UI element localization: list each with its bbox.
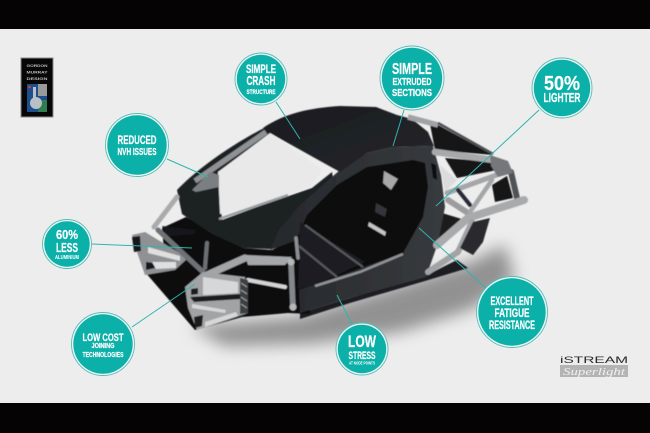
top black band	[0, 0, 650, 29]
sill tube	[315, 254, 403, 286]
logo: iStream Superlight	[560, 355, 628, 378]
front lower silver box	[185, 272, 248, 330]
front tubes	[154, 197, 298, 308]
rear skirt	[300, 260, 468, 319]
callout: simple extruded sections: EXTRUDED	[392, 76, 432, 88]
callout: excellent fatigue resistance: EXCELLENT	[490, 296, 534, 308]
callout lines	[92, 102, 539, 327]
rear upper black frame	[430, 124, 493, 155]
logo: Gordon Murray Design	[21, 58, 53, 117]
front black mass	[145, 217, 310, 330]
rear tubes	[428, 152, 524, 272]
rear joint cluster	[490, 155, 513, 177]
callout: low stress at node points: STRESS	[348, 350, 376, 362]
a pillar joint	[192, 172, 219, 192]
window light behind pillar	[440, 165, 457, 192]
seat slot light	[368, 222, 386, 236]
callout: 50% lighter: LIGHTER	[544, 91, 580, 105]
logo: Gordon Murray Design: MURRAY	[26, 70, 48, 74]
rear lower black floor	[426, 213, 465, 272]
callout: excellent fatigue resistance: RESISTANCE	[489, 320, 535, 332]
windscreen opening	[218, 133, 323, 214]
callout: 60% less aluminium: LESS	[56, 240, 78, 255]
a pillar tube	[195, 132, 266, 181]
rear hoop upper tube	[438, 123, 493, 154]
windscreen lower strip	[219, 195, 288, 219]
seat slot dark	[375, 203, 387, 217]
rear corner black frame	[492, 176, 513, 202]
callout: simple crash structure: CRASH	[246, 73, 276, 88]
callout: 50% lighter: 50%	[544, 72, 580, 95]
logo emblem	[27, 84, 47, 112]
front left silver box	[132, 232, 188, 275]
door opening interior	[298, 160, 428, 290]
logo: iStream Superlight: Superlight	[563, 366, 626, 378]
joint nodes	[288, 258, 294, 266]
callout: 60% less aluminium: ALUMINIUM	[55, 255, 79, 261]
rear mid black frame	[445, 158, 497, 178]
pillar slot	[431, 163, 437, 180]
callout: low stress at node points: LOW	[348, 332, 377, 351]
callout: simple extruded sections	[380, 46, 444, 110]
front lower box highlights	[192, 277, 238, 327]
logo: Gordon Murray Design: DESIGN	[26, 76, 48, 81]
callout: low stress at node points: AT NODE POINTS	[349, 360, 375, 366]
rear roof hoop	[408, 117, 438, 125]
rear module plate	[460, 218, 490, 255]
callout: reduced NVH issues	[106, 114, 168, 176]
front cross band	[245, 255, 292, 265]
floor panels	[298, 222, 365, 289]
logo: iStream Superlight: iSTREAM	[560, 355, 628, 366]
callout: low cost joining technologies: LOW COST	[82, 332, 124, 344]
ground shadow	[190, 245, 515, 346]
roof panel	[263, 106, 434, 172]
floor cross bars	[299, 225, 363, 277]
front lower box openings	[190, 282, 241, 328]
front left box details	[132, 226, 195, 270]
car chassis illustration	[132, 106, 524, 346]
callout: low cost joining technologies: JOINING	[92, 341, 115, 350]
callout: reduced NVH issues: REDUCED	[118, 133, 157, 147]
callout: 50% lighter	[532, 58, 592, 118]
callout: simple crash structure	[235, 53, 287, 105]
callout: reduced NVH issues: NVH ISSUES	[118, 147, 157, 158]
bottom black band	[0, 403, 650, 433]
side body	[270, 146, 445, 313]
logo: Gordon Murray Design: GORDON	[26, 63, 48, 68]
callout: excellent fatigue resistance: FATIGUE	[494, 308, 530, 320]
rear window light	[383, 171, 398, 190]
callout: simple extruded sections: SIMPLE	[392, 61, 432, 78]
callout: 60% less aluminium	[42, 220, 92, 268]
callout: simple extruded sections: SECTIONS	[392, 87, 432, 99]
dash panel with outer a-pillar band	[177, 126, 336, 249]
callout: simple crash structure: STRUCTURE	[246, 89, 276, 96]
callout: low cost joining technologies	[72, 312, 134, 376]
ribbed front panel	[240, 278, 248, 314]
callout: excellent fatigue resistance	[476, 276, 548, 348]
callout: low stress at node points	[336, 323, 388, 375]
callout: 60% less aluminium: 60%	[56, 228, 78, 242]
callout: low cost joining technologies: TECHNOLOGIES	[82, 350, 124, 359]
callout: simple crash structure: SIMPLE	[246, 64, 276, 76]
